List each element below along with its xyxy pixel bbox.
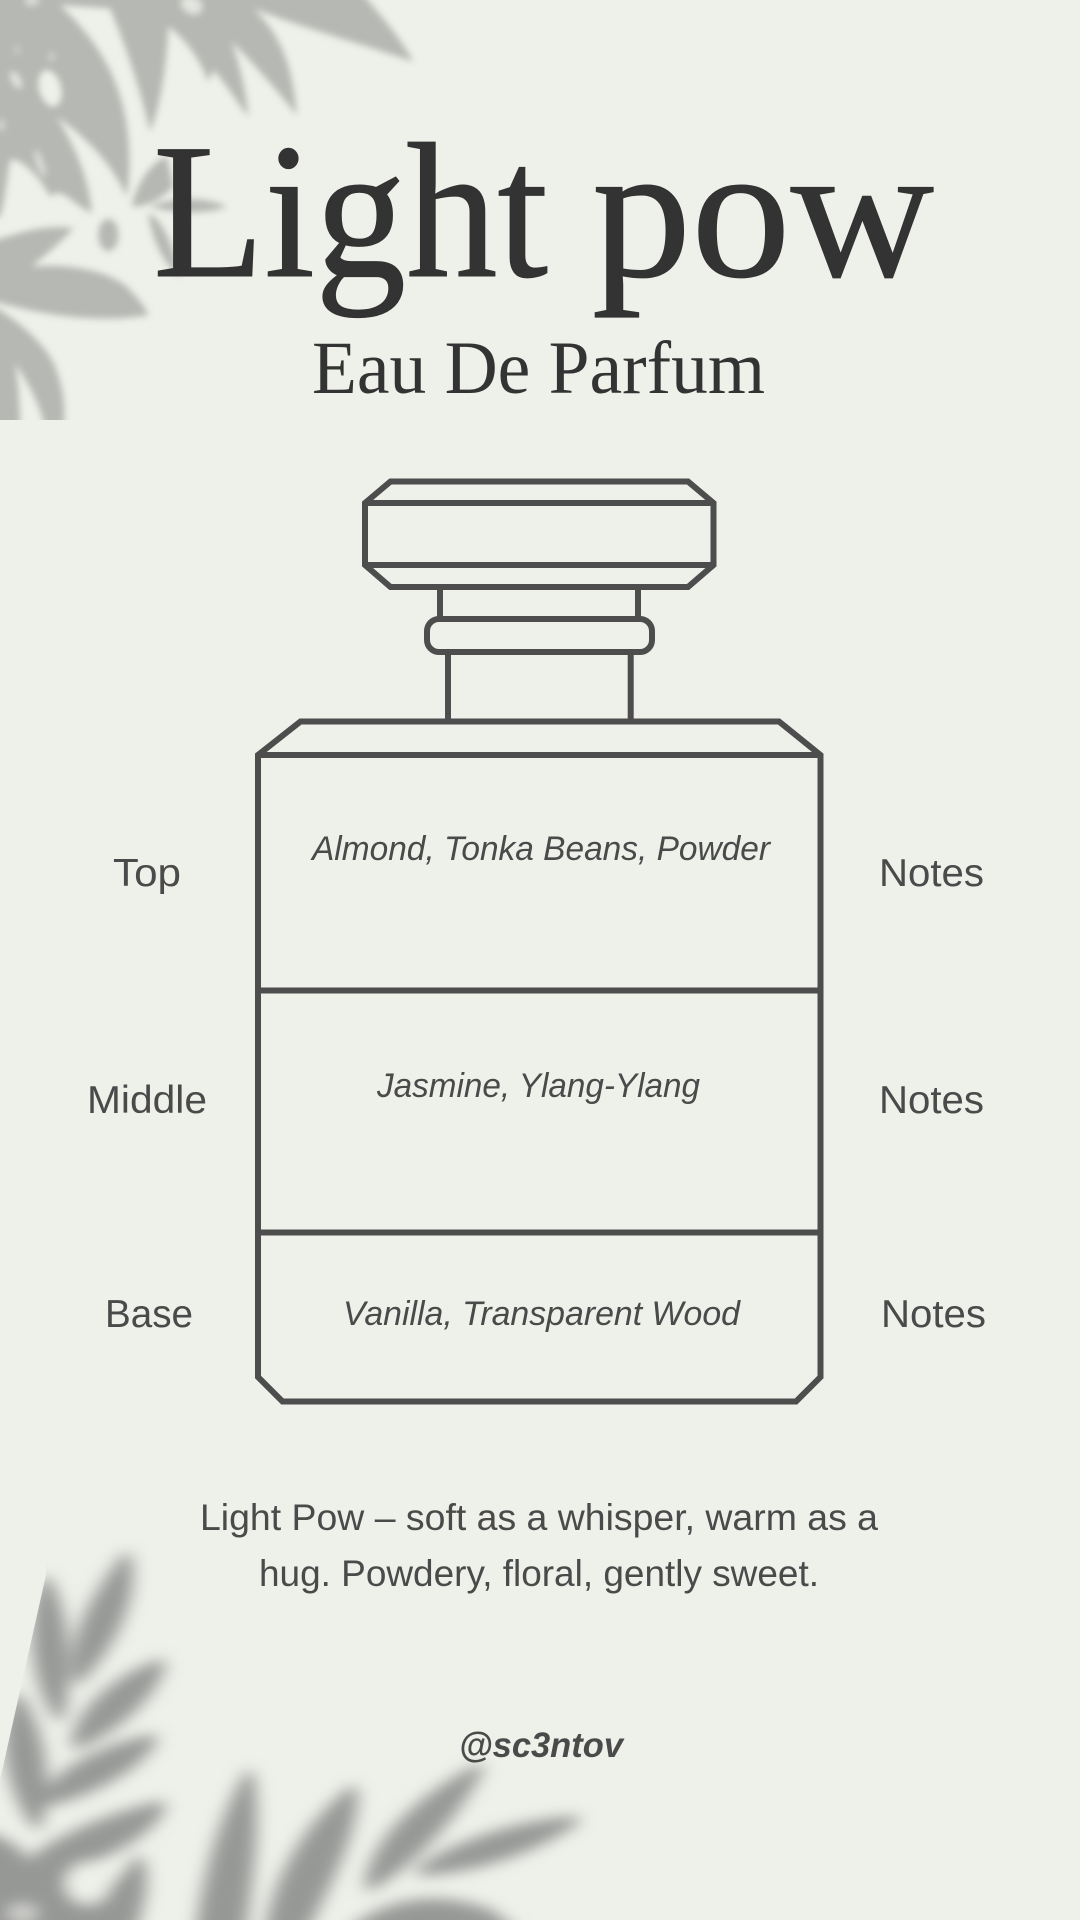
description text: [200, 1496, 878, 1594]
label: base notes left: Base: [105, 1293, 193, 1336]
bottle neck: [427, 587, 652, 721]
text: top note ingredients: Almond, Tonka Beans, Powder: [310, 830, 772, 868]
subtitle: Eau De Parfum: [312, 327, 765, 410]
label: base notes right: Notes: [881, 1293, 986, 1336]
bottle body: [258, 722, 820, 1402]
text: base note ingredients: Vanilla, Transparent Wood: [343, 1295, 741, 1333]
description text: hug. Powdery, floral, gently sweet.: [259, 1552, 819, 1594]
icon: perfume bottle outline: [258, 482, 820, 1402]
title: pow: [592, 104, 934, 318]
label: middle notes right: Notes: [879, 1079, 984, 1122]
label: top notes left: Top: [113, 852, 181, 895]
description text: Light Pow – soft as a whisper, warm as a: [200, 1496, 878, 1538]
social handle: @sc3ntov: [459, 1726, 625, 1765]
title: Light: [153, 104, 548, 318]
text: middle note ingredients: Jasmine, Ylang-Ylang: [376, 1067, 700, 1105]
label: top notes right: Notes: [879, 852, 984, 895]
decoration: top-left leaf shadow: [0, 0, 413, 433]
bottle cap: [365, 482, 714, 587]
label: middle notes left: Middle: [87, 1079, 207, 1122]
decoration: bottom-left leaf shadow: [0, 1557, 575, 1920]
